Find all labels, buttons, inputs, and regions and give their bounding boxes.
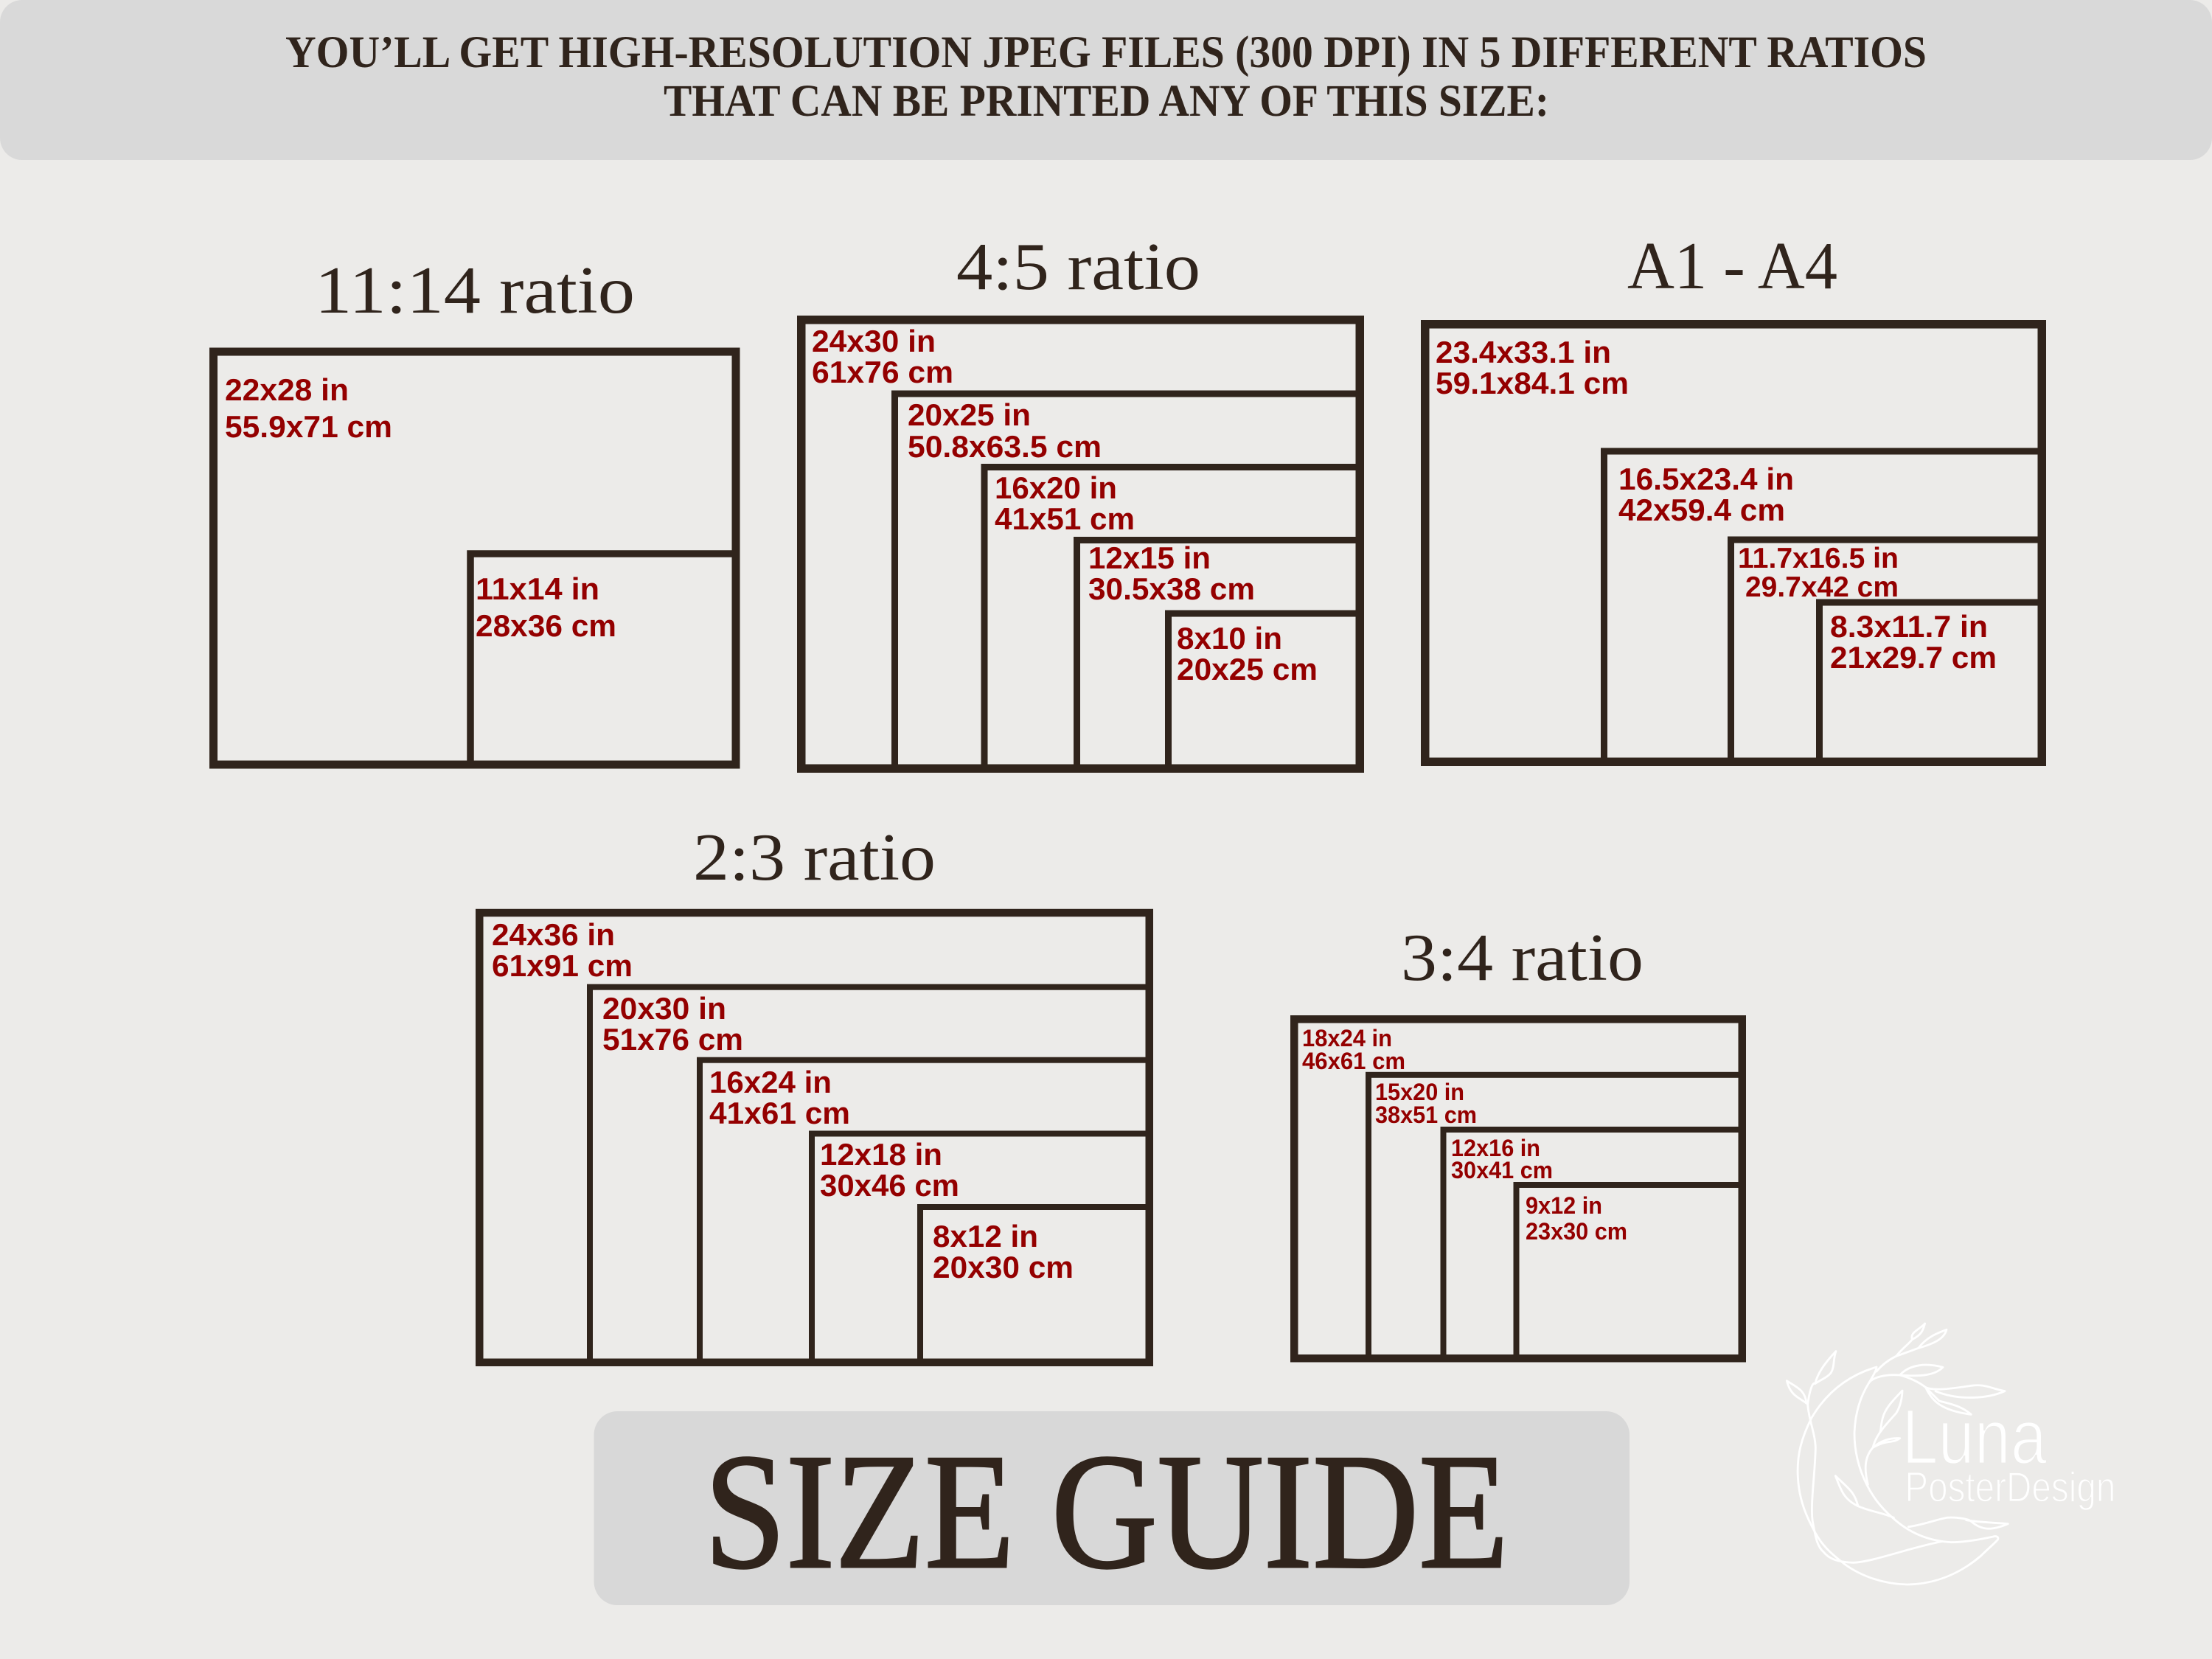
frame: 20x30 in	[590, 987, 1150, 1363]
label: 8x12 in: 8x12 in	[933, 1219, 1038, 1253]
label: 15x20 in	[1375, 1079, 1477, 1128]
label: 8.3x11.7 in	[1830, 609, 1997, 675]
label: 8x10 in	[1177, 621, 1318, 686]
banner text: YOU’LL GET HIGH-RESOLUTION JPEG FILES (300 DPI) IN 5 DIFFERENT RATIOS	[285, 28, 1927, 77]
panel: 4:5 ratio	[801, 229, 1360, 768]
frame: 15x20 in	[1368, 1075, 1742, 1358]
label: 23.4x33.1 in: 23.4x33.1 in	[1436, 335, 1611, 369]
label: 22x28 in: 55.9x71 cm	[225, 409, 392, 444]
frame: 8x10 in	[1168, 613, 1360, 768]
frame: 8x12 in	[920, 1207, 1150, 1363]
label: 12x16 in: 30x41 cm	[1451, 1157, 1553, 1183]
label: 8x12 in: 20x30 cm	[933, 1250, 1074, 1284]
frame: 9x12 in	[1516, 1185, 1742, 1358]
logo: Luna PosterDesign	[1787, 1324, 2115, 1585]
label: 16x20 in: 16x20 in	[995, 470, 1117, 505]
label: 12x18 in	[820, 1137, 959, 1203]
label: 12x15 in: 12x15 in	[1088, 540, 1211, 575]
frame: 11x14 in	[470, 554, 736, 765]
label: 12x15 in	[1088, 540, 1255, 606]
label: 16x20 in: 41x51 cm	[995, 501, 1135, 536]
frame: 16x24 in	[700, 1060, 1150, 1363]
label: 11x14 in: 11x14 in	[476, 571, 599, 606]
heading: A1 - A4: A1 - A4	[1627, 229, 1837, 303]
label: 16x24 in: 41x61 cm	[709, 1096, 850, 1130]
label: 9x12 in: 23x30 cm	[1526, 1218, 1627, 1245]
label: 16.5x23.4 in	[1618, 462, 1794, 527]
top banner	[0, 0, 2212, 160]
heading: 11:14 ratio: 11:14 ratio	[315, 253, 635, 327]
heading: 2:3 ratio: 2:3 ratio	[693, 820, 936, 894]
label: 20x30 in: 51x76 cm	[602, 1022, 743, 1057]
heading: 3:4 ratio: 3:4 ratio	[1401, 920, 1644, 995]
heading: 4:5 ratio: 4:5 ratio	[956, 229, 1200, 304]
label: 9x12 in: 9x12 in	[1526, 1192, 1602, 1219]
frame: 18x24 in	[1294, 1019, 1742, 1358]
frame: 23.4x33.1 in	[1425, 324, 2042, 762]
banner text: THAT CAN BE PRINTED ANY OF THIS SIZE:	[664, 77, 1549, 126]
label: 16.5x23.4 in: 16.5x23.4 in	[1618, 462, 1794, 496]
frame: 24x30 in	[801, 320, 1360, 768]
size guide banner	[594, 1411, 1630, 1605]
label: 20x25 in: 50.8x63.5 cm	[908, 429, 1102, 464]
frame: 22x28 in	[214, 352, 736, 765]
label: 22x28 in	[225, 372, 392, 444]
label: 24x30 in: 24x30 in	[812, 324, 936, 358]
label: 23.4x33.1 in: 59.1x84.1 cm	[1436, 366, 1629, 400]
label: 24x36 in: 61x91 cm	[492, 948, 633, 983]
label: 12x15 in: 30.5x38 cm	[1088, 571, 1255, 606]
label: 18x24 in: 46x61 cm	[1302, 1048, 1405, 1074]
panel: A1 - A4	[1425, 229, 2042, 762]
label: 12x16 in: 12x16 in	[1451, 1135, 1540, 1161]
label: 16x24 in: 16x24 in	[709, 1065, 832, 1099]
label: 24x30 in	[812, 324, 953, 389]
label: 20x25 in	[908, 397, 1102, 464]
label: 23.4x33.1 in	[1436, 335, 1629, 400]
label: 18x24 in	[1302, 1025, 1405, 1074]
frame: 11.7x16.5 in	[1731, 540, 2042, 762]
label: 11.7x16.5 in: 11.7x16.5 in	[1738, 543, 1899, 574]
label: 16.5x23.4 in: 42x59.4 cm	[1618, 493, 1785, 527]
label: 15x20 in: 38x51 cm	[1375, 1102, 1477, 1128]
label: 11.7x16.5 in	[1738, 543, 1899, 603]
label: 20x25 in: 20x25 in	[908, 397, 1031, 432]
label: 20x30 in	[602, 991, 743, 1057]
label: 12x18 in: 12x18 in	[820, 1137, 942, 1172]
banner text	[285, 28, 1927, 126]
label: 15x20 in: 15x20 in	[1375, 1079, 1464, 1105]
panel: 11:14 ratio	[214, 253, 736, 765]
label: 11.7x16.5 in: 29.7x42 cm	[1745, 571, 1899, 603]
label: 8x10 in: 20x25 cm	[1177, 652, 1318, 686]
panel: 2:3 ratio	[479, 820, 1150, 1363]
title: SIZE GUIDE: SIZE GUIDE	[704, 1420, 1509, 1603]
label: 8x10 in: 8x10 in	[1177, 621, 1282, 655]
label: 24x30 in: 61x76 cm	[812, 355, 953, 389]
frame: 20x25 in	[895, 394, 1360, 768]
logo wordmark: Luna	[1902, 1394, 2047, 1481]
label: 12x18 in: 30x46 cm	[820, 1168, 959, 1203]
logo wordmark	[1902, 1394, 2115, 1512]
frame: 16x20 in	[984, 467, 1360, 768]
logo wordmark: PosterDesign	[1905, 1464, 2115, 1512]
logo emblem: crescent and leaves	[1787, 1324, 2008, 1585]
frame: 24x36 in	[479, 913, 1150, 1363]
label: 16x20 in	[995, 470, 1135, 536]
frame: 12x18 in	[812, 1134, 1150, 1363]
label: 22x28 in: 22x28 in	[225, 372, 349, 407]
panel: 3:4 ratio	[1294, 920, 1742, 1358]
label: 9x12 in	[1526, 1192, 1627, 1245]
label: 24x36 in: 24x36 in	[492, 917, 615, 952]
label: 12x16 in	[1451, 1135, 1553, 1183]
label: 16x24 in	[709, 1065, 850, 1130]
label: 8.3x11.7 in: 8.3x11.7 in	[1830, 609, 1988, 644]
label: 18x24 in: 18x24 in	[1302, 1025, 1392, 1051]
label: 20x30 in: 20x30 in	[602, 991, 726, 1026]
frame: 16.5x23.4 in	[1604, 451, 2042, 762]
label: 11x14 in: 28x36 cm	[476, 608, 616, 643]
label: 8.3x11.7 in: 21x29.7 cm	[1830, 640, 1997, 675]
label: 24x36 in	[492, 917, 633, 983]
frame: 12x15 in	[1077, 540, 1360, 768]
label: 8x12 in	[933, 1219, 1074, 1284]
frame: 12x16 in	[1444, 1130, 1742, 1358]
frame: 8.3x11.7 in	[1820, 602, 2042, 762]
label: 11x14 in	[476, 571, 616, 643]
